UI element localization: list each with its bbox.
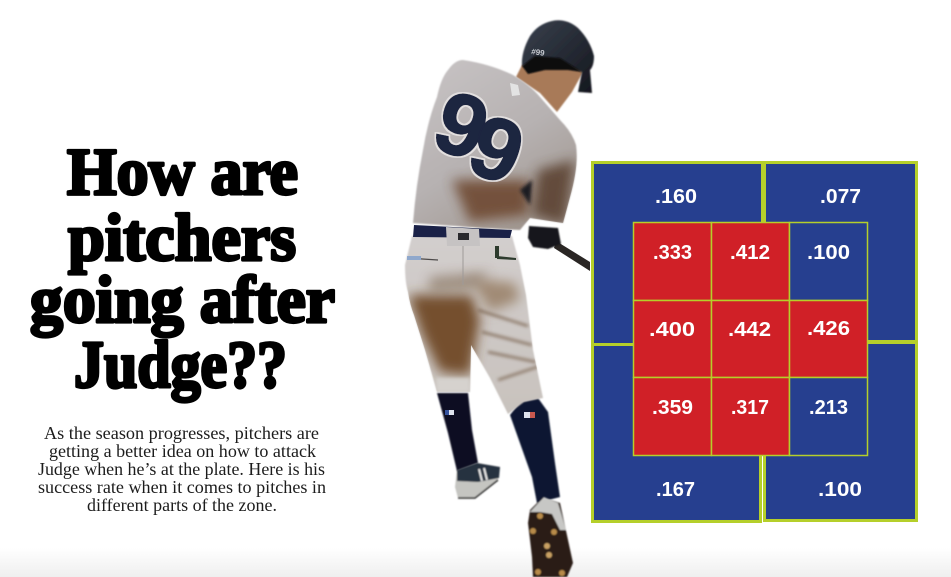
title: pitchers	[68, 201, 296, 275]
outer zone top right	[764, 162, 916, 342]
cell .426: .426	[807, 317, 850, 340]
inner zone grid	[634, 222, 868, 456]
cell .317	[712, 378, 790, 456]
title: How are	[67, 135, 298, 209]
jersey number 99: 9	[457, 94, 537, 204]
left leg sock	[437, 393, 478, 471]
jersey	[413, 60, 577, 230]
background floor gradient	[0, 548, 951, 577]
outer zone bottom left: .167	[656, 479, 695, 501]
cell .359: .359	[652, 396, 693, 419]
cell .100: .100	[807, 241, 850, 264]
right leg sock	[510, 398, 560, 503]
outer zone top left: .160	[655, 186, 697, 208]
strike zone chart	[592, 162, 916, 522]
cell .412	[712, 222, 790, 300]
neck and face	[516, 58, 583, 112]
cell .412: .412	[730, 241, 770, 264]
description text: success rate when it comes to pitches in	[38, 477, 326, 497]
cell .333: .333	[653, 241, 692, 264]
cell .100	[790, 222, 868, 300]
MLB logos on socks	[445, 410, 535, 418]
title: Judge??	[74, 328, 287, 402]
description text: different parts of the zone.	[87, 495, 277, 515]
bat	[554, 241, 590, 271]
belt	[413, 225, 512, 246]
jersey number 99	[422, 70, 537, 204]
cell .317: .317	[731, 396, 769, 419]
cell .442	[712, 300, 790, 378]
cell .359	[634, 378, 712, 456]
cell .400	[634, 300, 712, 378]
title	[30, 135, 335, 402]
description text: Judge when he’s at the plate. Here is his	[38, 459, 325, 479]
helmet: #99	[531, 47, 546, 58]
jersey patch	[510, 83, 520, 96]
player: Aaron Judge batting illustration	[405, 20, 594, 577]
title: going after	[30, 263, 335, 337]
cell .333	[634, 222, 712, 300]
outer zone bottom left	[592, 344, 760, 522]
cell .213: .213	[809, 396, 848, 419]
description text	[38, 423, 326, 515]
helmet	[522, 20, 594, 93]
outer zone bottom right: .100	[818, 479, 862, 501]
outer zone top left	[592, 162, 762, 344]
right shoe with cleats	[528, 497, 573, 577]
description text: As the season progresses, pitchers are	[44, 423, 319, 443]
cell .442: .442	[728, 318, 771, 341]
description text: getting a better idea on how to attack	[49, 441, 316, 461]
outer zone top right: .077	[820, 186, 861, 208]
jersey number 99: 9	[422, 70, 502, 180]
pants	[405, 236, 543, 414]
cell .400: .400	[649, 318, 695, 341]
cell .426	[790, 300, 868, 378]
cell .213	[790, 378, 868, 456]
batting glove	[528, 226, 561, 249]
outer zone bottom right	[764, 342, 916, 520]
left shoe	[455, 463, 500, 498]
